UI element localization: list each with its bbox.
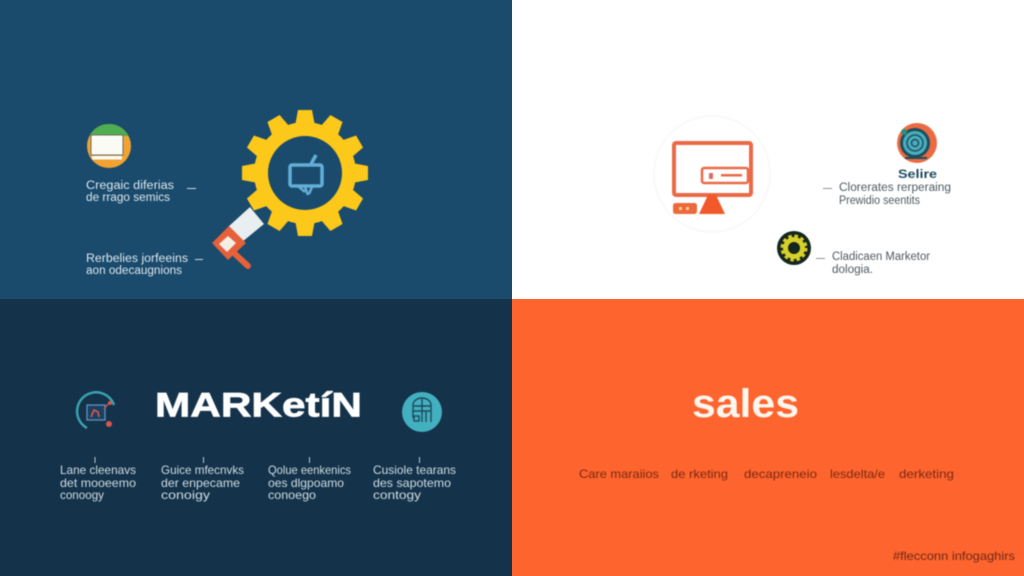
text: right note one: Clorerates rerperaing bbox=[839, 182, 951, 194]
text: column one: Lane cleenavs bbox=[60, 463, 136, 477]
text: right note one: Prewidio seentits bbox=[839, 195, 920, 207]
icon: teal dial badge bbox=[897, 123, 937, 163]
text: column two: conoigy bbox=[161, 488, 210, 502]
icon: screen inside gear bbox=[290, 155, 322, 195]
panel: top-right white bbox=[512, 0, 1024, 299]
icon: chart ring bbox=[77, 392, 114, 428]
text: column four: Cusiole tearans bbox=[373, 463, 456, 477]
text: column one: det mooeemo bbox=[60, 476, 136, 490]
text: column three bbox=[268, 457, 351, 502]
text: column three: conoego bbox=[268, 488, 316, 502]
text: right note two bbox=[816, 251, 930, 276]
text: column three: Qolue eenkenics bbox=[268, 463, 351, 477]
text: sales labels: de rketing bbox=[671, 467, 728, 481]
text: first note bbox=[86, 180, 196, 204]
text: sales labels: derketing bbox=[899, 467, 954, 481]
text: second note: Rerbelies jorfeeins bbox=[86, 253, 188, 265]
panel: top-left blue bbox=[0, 0, 512, 299]
text: second note: aon odecaugnions bbox=[86, 265, 182, 277]
text: column four: des sapotemo bbox=[373, 476, 451, 490]
text: column two: der enpecame bbox=[161, 476, 240, 490]
heading: Selire: Selire bbox=[898, 167, 937, 181]
title: sales: sales bbox=[692, 382, 799, 426]
icon: teal building badge bbox=[402, 392, 442, 432]
text: footer credit: #flecconn infogaghirs bbox=[893, 549, 1015, 563]
text: column four bbox=[373, 457, 456, 502]
text: second note bbox=[86, 253, 203, 277]
text: sales labels bbox=[579, 467, 954, 481]
icon: yellow gear bbox=[242, 110, 368, 236]
text: first note: de rrago semics bbox=[86, 192, 170, 204]
text: column four: contogy bbox=[373, 488, 421, 502]
text: sales labels: Care maraiios bbox=[579, 467, 659, 481]
text: column two bbox=[161, 457, 244, 502]
text: right note one bbox=[823, 182, 951, 207]
text: first note: Cregaic diferias bbox=[86, 180, 174, 192]
panel: bottom-left navy bbox=[0, 299, 512, 576]
text: column one: conoogy bbox=[60, 488, 104, 502]
text: right note two: Cladicaen Marketor bbox=[832, 251, 930, 263]
icon: monitor badge bbox=[87, 124, 131, 168]
panel: bottom-right orange bbox=[512, 299, 1024, 576]
text: column one bbox=[60, 457, 136, 502]
text: column three: oes dlgpoamo bbox=[268, 476, 344, 490]
text: sales labels: decapreneio bbox=[744, 467, 817, 481]
title: Marketin: MARKetíN bbox=[155, 386, 362, 424]
text: column two: Guice mfecnvks bbox=[161, 463, 244, 477]
icon: magnifier handle bbox=[212, 207, 264, 266]
icon: monitor bbox=[654, 116, 770, 232]
text: sales labels: lesdelta/e bbox=[830, 467, 885, 481]
icon: small gear badge bbox=[777, 231, 811, 265]
text: right note two: dologia. bbox=[832, 264, 873, 276]
